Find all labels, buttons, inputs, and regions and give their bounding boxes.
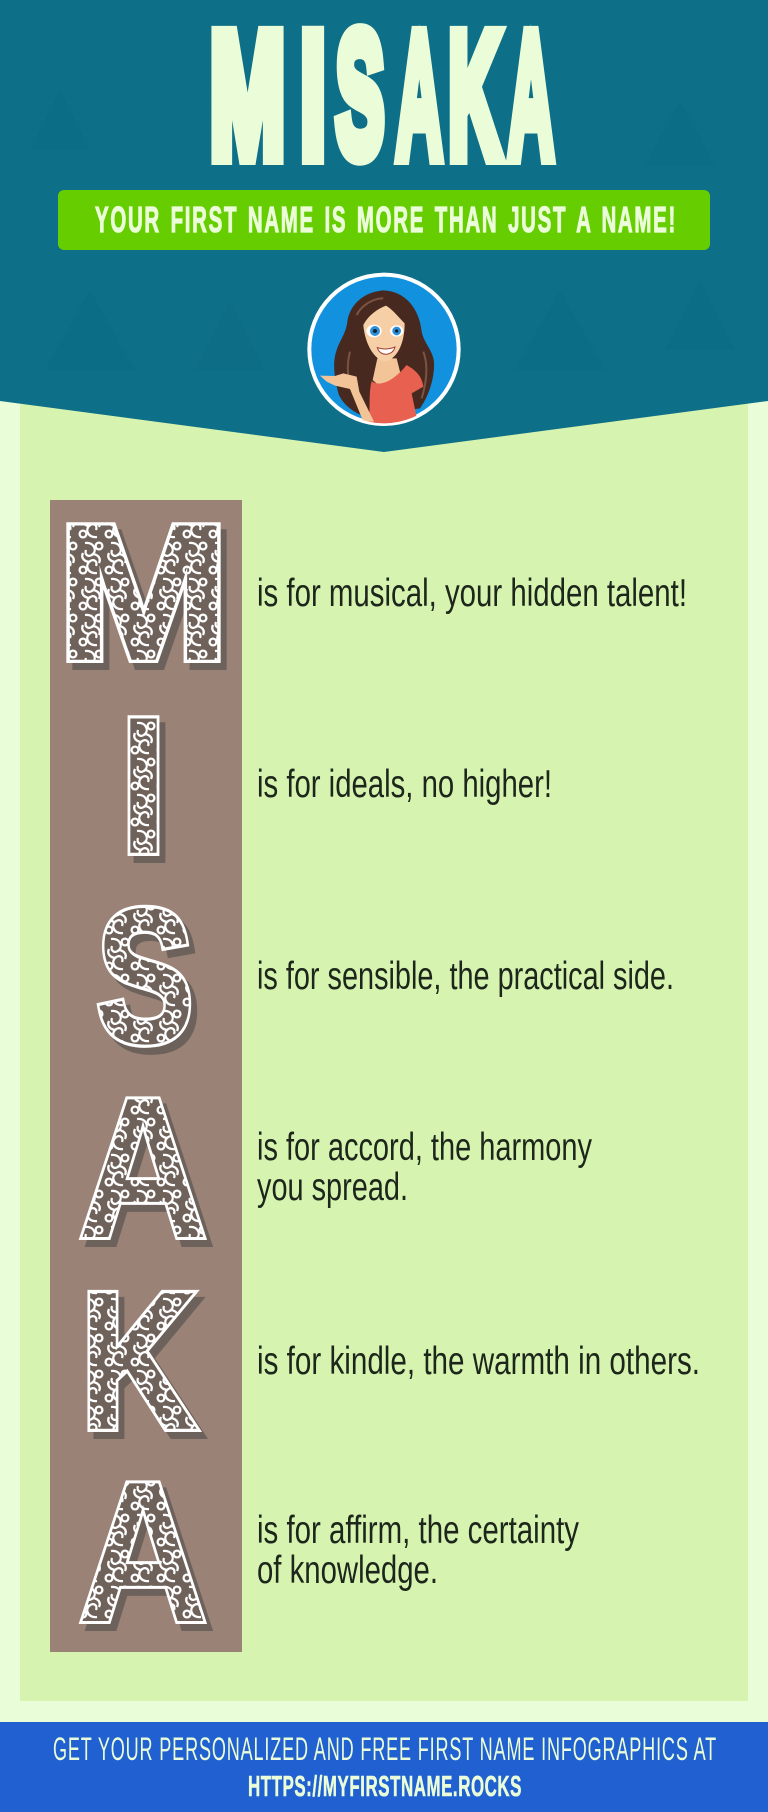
- title: M: [210, 0, 285, 194]
- text: I line: is for ideals, no higher!: [257, 763, 552, 806]
- footer band: HTTPS://MYFIRSTNAME.ROCKS: [248, 1771, 522, 1803]
- letter S: S: [103, 878, 199, 1088]
- panel: brown letter column: [50, 500, 242, 1652]
- letter K: K: [81, 1253, 195, 1468]
- text: A line: of knowledge.: [257, 1549, 438, 1592]
- panel: inner green content area: [20, 380, 748, 1701]
- letter A: A: [84, 1064, 214, 1287]
- text: A: [508, 0, 554, 195]
- title: K: [449, 0, 501, 194]
- face: [363, 306, 405, 362]
- text: A line: [257, 1509, 579, 1592]
- text: A line: is for affirm, the certainty: [257, 1509, 579, 1552]
- title: [210, 0, 554, 197]
- letter M: M: [64, 494, 235, 706]
- subtitle banner: [58, 190, 710, 250]
- footer band: [0, 1722, 768, 1812]
- icon: woman avatar in circle: [309, 275, 459, 425]
- letter I: I: [121, 680, 166, 892]
- header band: [0, 0, 768, 452]
- text: A line: is for accord, the harmony: [257, 1126, 592, 1169]
- letter M: M: [58, 487, 229, 699]
- letter A: A: [78, 1441, 208, 1664]
- letter A: A: [78, 1057, 208, 1280]
- letter S: S: [97, 871, 193, 1081]
- shirt: [368, 365, 423, 425]
- title: S: [336, 0, 384, 193]
- letter K: K: [87, 1260, 201, 1475]
- letter I: I: [121, 680, 166, 892]
- hair: [334, 290, 434, 417]
- letter M: M: [58, 487, 229, 699]
- letter A: A: [78, 1057, 208, 1280]
- letter A: A: [84, 1448, 214, 1671]
- letter K: K: [81, 1253, 195, 1468]
- text: A line: you spread.: [257, 1166, 408, 1209]
- hair highlights: [348, 298, 426, 398]
- mouth: [377, 347, 395, 354]
- neck and chest: [372, 358, 400, 384]
- arm and hand: [320, 373, 374, 422]
- letter I: I: [127, 687, 172, 899]
- text: A line: [257, 1126, 592, 1209]
- letter S: S: [97, 871, 193, 1081]
- title: A: [396, 0, 442, 195]
- eyes: [366, 325, 382, 337]
- letter A: A: [78, 1441, 208, 1664]
